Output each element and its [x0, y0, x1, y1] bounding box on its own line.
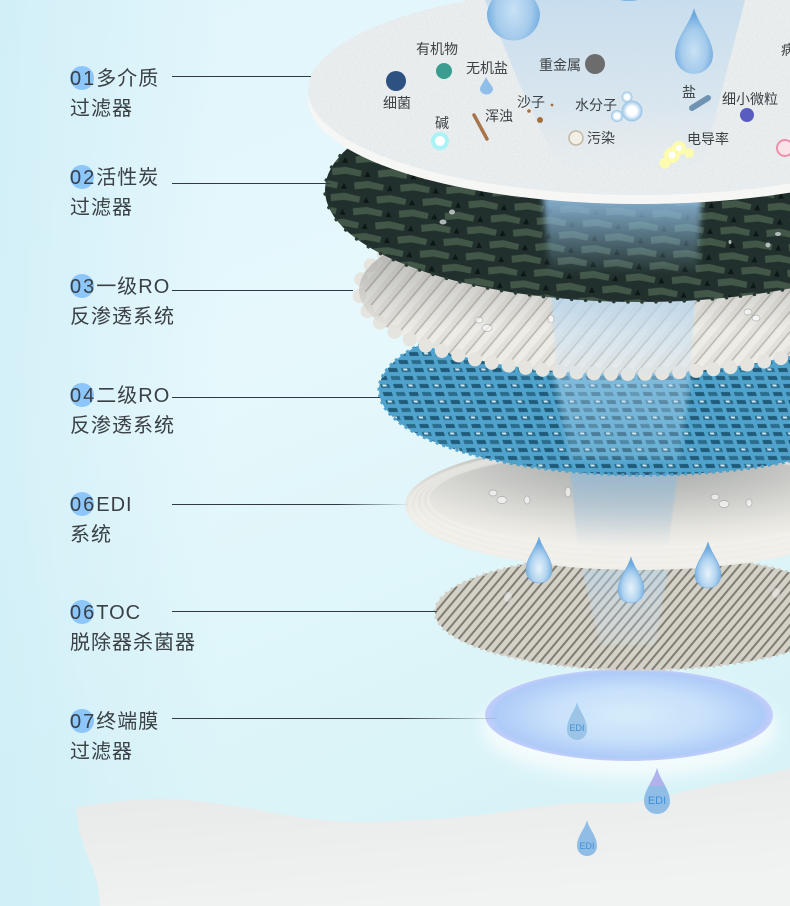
- EDI drop: bottom: EDI: [579, 841, 595, 851]
- water drop: below EDI left: [526, 537, 552, 583]
- particle: conductivity: [660, 131, 729, 168]
- particle: sand: 沙子: [517, 94, 545, 110]
- particle: alkali: [431, 115, 449, 150]
- label 02: activated carbon filter: 02活性炭: [70, 166, 159, 189]
- particle: alkali: 碱: [435, 115, 449, 131]
- label 03: primary RO system: 03一级RO: [70, 275, 170, 298]
- label 06: TOC degerminator: 脱除器杀菌器: [70, 631, 196, 654]
- water drop: top left: [487, 0, 540, 40]
- label 02: activated carbon filter: [70, 165, 330, 219]
- base: white cloth: [76, 768, 790, 906]
- filter layer 5: EDI ringed disc: [405, 440, 790, 570]
- filter layer 3: primary RO ribbed disc: [352, 252, 790, 381]
- filter layer 7: terminal membrane: [481, 669, 777, 778]
- particle: bacteria: [383, 71, 411, 111]
- EDI drop: bottom: [577, 820, 597, 856]
- particle: sand: [517, 94, 553, 123]
- label 06: EDI system: [70, 492, 408, 546]
- label 07: terminal membrane filter: 过滤器: [70, 740, 133, 763]
- particle: water molecule: 水分子: [575, 97, 617, 113]
- label 04: secondary RO system: [70, 383, 380, 437]
- particle: organic matter: [416, 41, 458, 79]
- filter layer 4: secondary RO blue mesh: [378, 344, 790, 476]
- water drop: top right: [675, 8, 713, 74]
- label 03: primary RO system: 反渗透系统: [70, 305, 175, 328]
- filter layer 1: multi-media disc: [308, 0, 790, 204]
- particle: turbidity: [474, 108, 513, 139]
- particle: salt: 盐: [682, 84, 696, 100]
- water drop: top sliver: [615, 0, 643, 1]
- label 01: multi-media filter: 01多介质: [70, 67, 159, 90]
- particle: pink dot: [777, 140, 790, 156]
- particle: bacteria: 细菌: [383, 95, 411, 111]
- water drop: below EDI right: [695, 542, 721, 588]
- filter layer 6: TOC ribbed disc: [435, 554, 790, 670]
- label 06: TOC degerminator: 06TOC: [70, 602, 141, 624]
- EDI drop: middle: [644, 768, 670, 814]
- particle: conductivity: 电导率: [687, 131, 729, 147]
- particle: heavy metal: 重金属: [539, 57, 581, 73]
- particle: fine particles: [722, 91, 778, 122]
- label 07: terminal membrane filter: [70, 709, 497, 763]
- label 06: EDI system: 06EDI: [70, 494, 133, 516]
- label 06: EDI system: 系统: [70, 523, 112, 546]
- particle: water molecule: [575, 92, 642, 122]
- particle: pollution: 污染: [587, 130, 615, 146]
- label 04: secondary RO system: 04二级RO: [70, 384, 170, 407]
- particle: heavy metal: [539, 54, 605, 74]
- particles on the multi-media disc: [383, 41, 790, 168]
- particle: fine particles: 细小微粒: [722, 91, 778, 107]
- particle: inorganic salt: [466, 60, 508, 94]
- label 03: primary RO system: [70, 274, 353, 328]
- particle: organic matter: 有机物: [416, 41, 458, 57]
- EDI drop: on membrane: [567, 702, 587, 740]
- label 01: multi-media filter: 过滤器: [70, 97, 133, 120]
- label 06: TOC degerminator: [70, 600, 437, 654]
- label 01: multi-media filter: [70, 66, 311, 120]
- water drop: below EDI centre: [618, 557, 644, 603]
- filter layer 2: activated carbon disc: [323, 148, 790, 304]
- EDI drop: middle: EDI: [648, 795, 666, 807]
- label 04: secondary RO system: 反渗透系统: [70, 414, 175, 437]
- particle: pollution: [569, 130, 615, 146]
- particle: turbidity: 浑浊: [485, 108, 513, 124]
- EDI drop: on membrane: EDI: [569, 723, 585, 733]
- particle: inorganic salt: 无机盐: [466, 60, 508, 76]
- particle: salt: [682, 84, 708, 108]
- label 02: activated carbon filter: 过滤器: [70, 196, 133, 219]
- label 07: terminal membrane filter: 07终端膜: [70, 710, 159, 733]
